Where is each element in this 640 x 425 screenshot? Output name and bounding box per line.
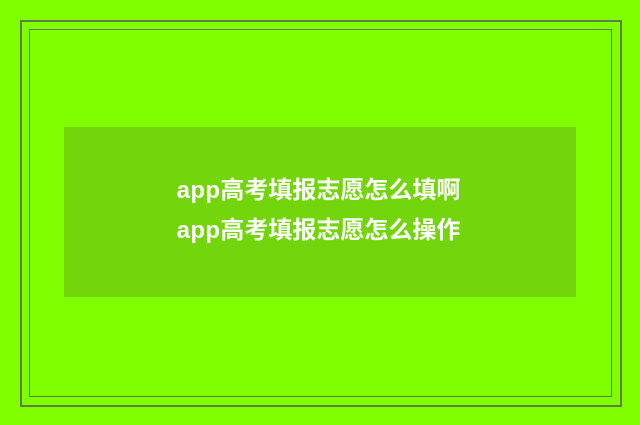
title: app高考填报志愿怎么填啊 bbox=[177, 177, 460, 204]
title: app高考填报志愿怎么操作 bbox=[177, 217, 460, 244]
inner frame bbox=[29, 29, 612, 397]
title bbox=[177, 177, 460, 244]
panel: title band bbox=[64, 127, 576, 297]
